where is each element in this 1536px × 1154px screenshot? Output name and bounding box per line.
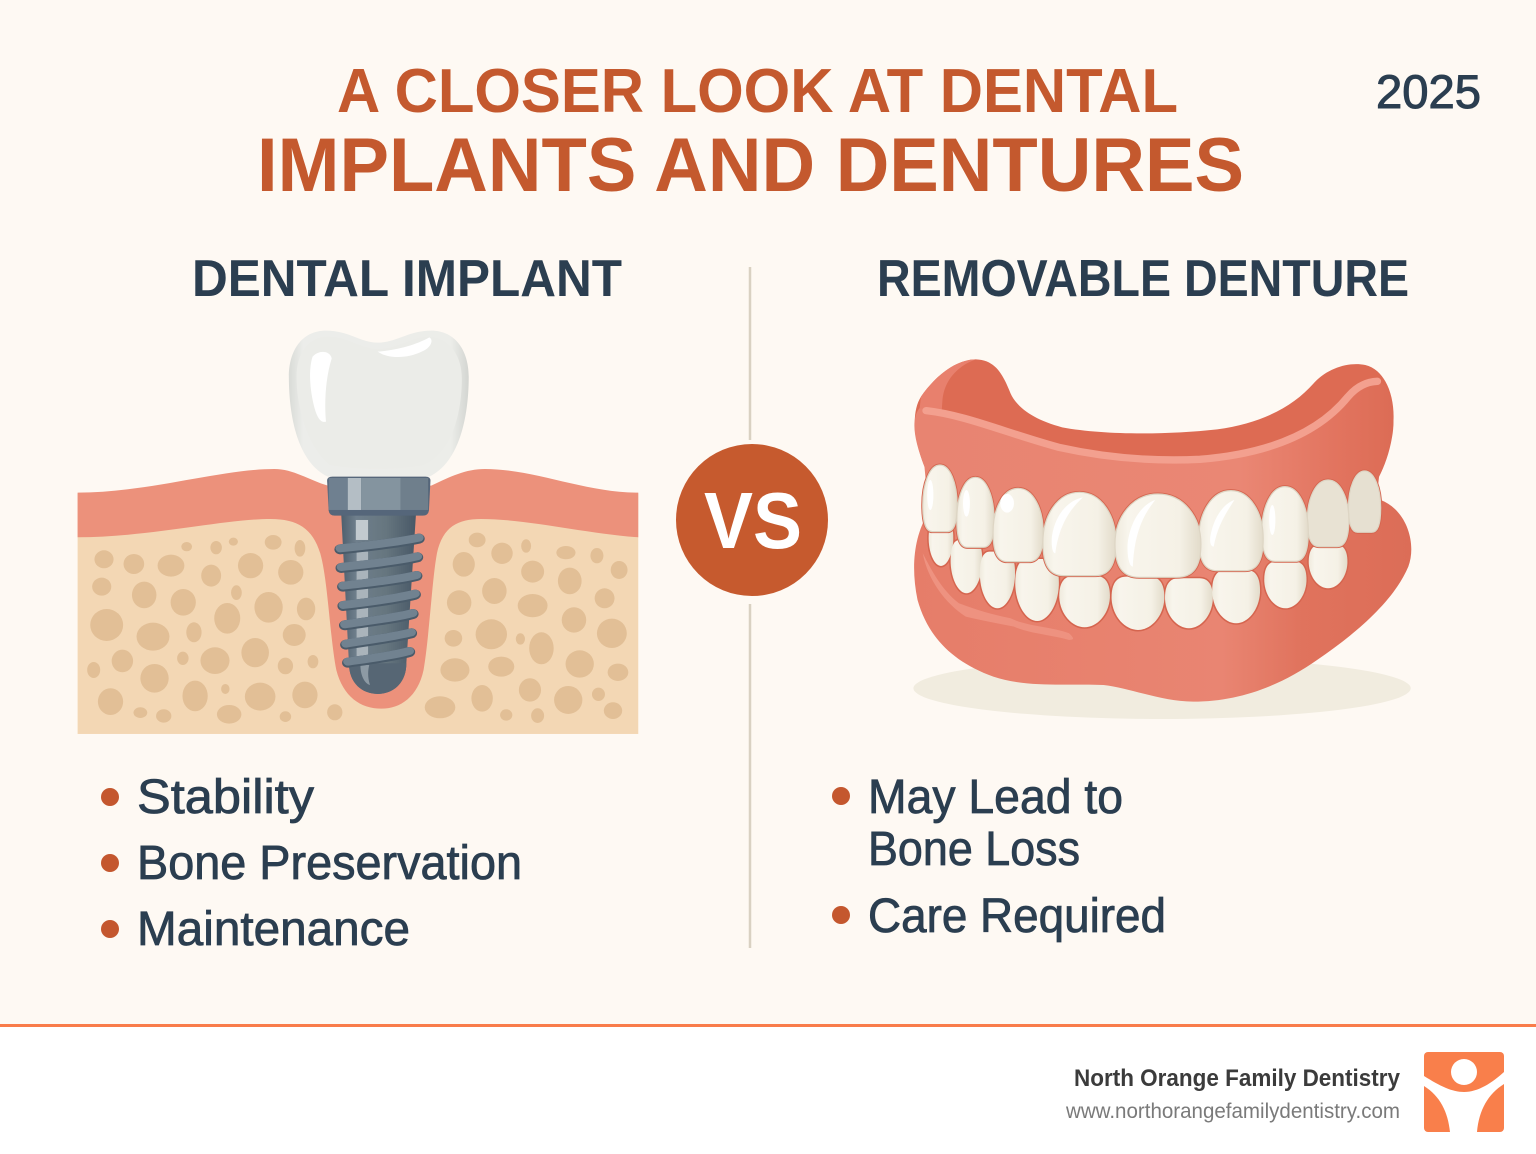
vs badge [676,444,828,596]
lower teeth [929,521,1347,630]
gum tissue [78,469,638,709]
title: IMPLANTS AND DENTURES [257,123,1244,208]
bullet: stability: Stability [137,771,314,824]
title: A CLOSER LOOK AT DENTAL [337,57,1178,126]
bullet: bone preservation: Bone Preservation [137,837,522,890]
tooth highlights [927,480,1275,567]
bullet: maintenance: Maintenance [137,903,410,956]
upper teeth gum shadow [923,465,1381,577]
upper denture inner rim [915,359,1394,513]
upper denture highlight [926,381,1377,460]
illustration: removable denture [913,359,1411,719]
footer website: www.northorangefamilydentistry.com [1065,1100,1400,1123]
implant screw [340,515,419,694]
heading: dental implant: DENTAL IMPLANT [192,250,622,308]
bone block [78,493,638,734]
upper denture left outer lobe [919,359,976,412]
center divider [749,267,751,948]
icon: practice logo [1424,1052,1504,1132]
crown [289,331,469,477]
bullet: care required: Care Required [868,890,1166,943]
ground shadow [913,658,1411,719]
lower denture base [914,490,1411,702]
footer band [0,1024,1536,1154]
abutment [327,477,430,516]
list: denture drawbacks [832,771,1166,943]
lower gum highlights [923,553,1073,640]
illustration: dental implant in gum and bone [78,331,638,734]
title [257,57,1244,208]
bullet: may lead to bone loss: May Lead to [868,771,1123,824]
bone pores [87,533,628,724]
heading: removable denture: REMOVABLE DENTURE [877,250,1409,308]
upper denture front face [914,382,1394,540]
footer practice name: North Orange Family Dentistry [1074,1065,1401,1092]
year label: 2025 [1376,65,1481,118]
bullet: may lead to bone loss [832,771,1123,876]
upper teeth [923,465,1381,577]
vs badge: VS [704,476,802,565]
bullet: may lead to bone loss: Bone Loss [868,823,1080,876]
list: implant benefits [101,771,522,956]
lower teeth gum shadow [929,521,1347,630]
